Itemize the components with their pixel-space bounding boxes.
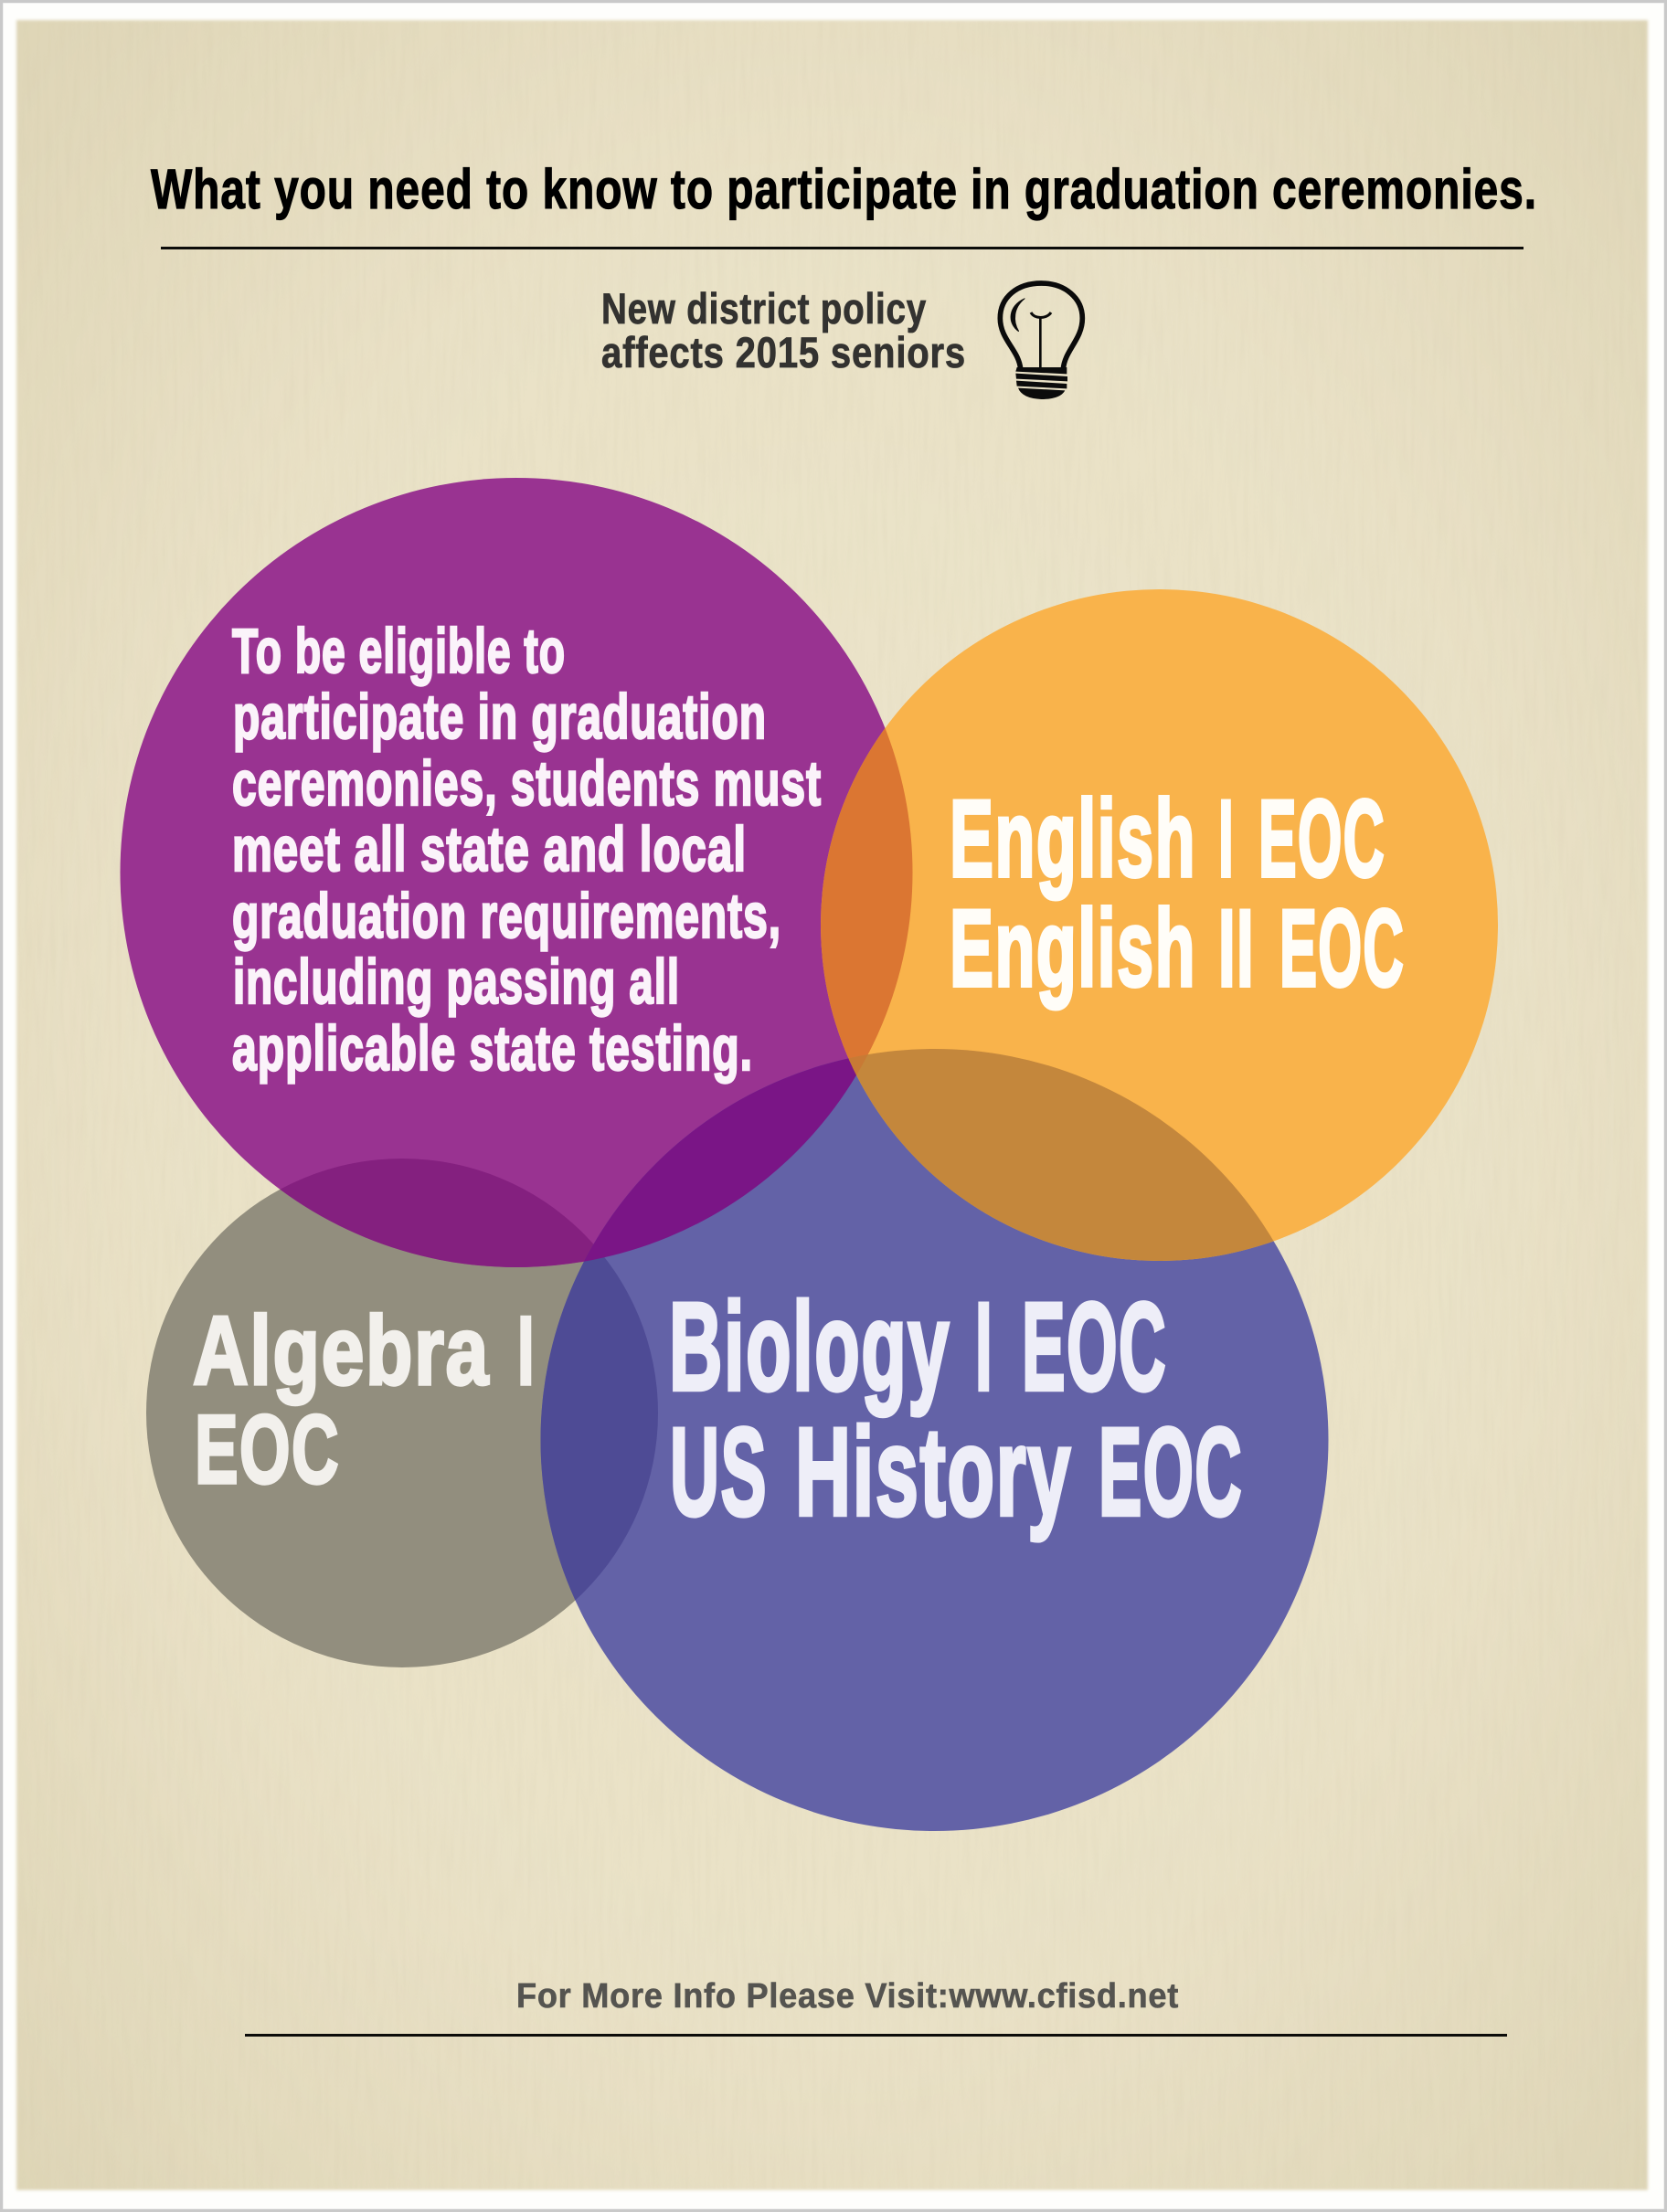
circle: algebra grey: [146, 1159, 658, 1667]
text: biology and history exams: US: [670, 1402, 768, 1542]
text: algebra exam: Algebra: [193, 1296, 490, 1405]
text: english exams: [950, 778, 1405, 1010]
text: eligibility requirements: including passing all: [233, 947, 680, 1017]
title rule: [161, 247, 1524, 249]
text: eligibility requirements: meet all state and local: [232, 814, 747, 884]
text: english exams: English: [950, 887, 1196, 1010]
overlap: purple, orange and blue: [848, 1054, 868, 1074]
text: english exams: EOC: [1258, 778, 1386, 900]
footer link text: For More Info Please Visit:www.cfisd.net: [516, 1977, 1179, 2016]
icon: light bulb: [1000, 283, 1082, 399]
text: eligibility requirements: graduation requirements,: [232, 881, 781, 951]
text: biology and history exams: [669, 1277, 1243, 1542]
subtitle: [601, 284, 966, 376]
text: biology and history exams: History: [795, 1402, 1072, 1542]
circle: biology and history blue: [541, 1049, 1329, 1831]
subtitle: New district policy: [601, 284, 927, 333]
overlap: purple and grey: [280, 1159, 594, 1267]
text: algebra exam: I: [517, 1296, 536, 1405]
overlap: purple and orange: [821, 728, 912, 1074]
text: eligibility requirements: applicable state testing.: [232, 1013, 753, 1084]
text: algebra exam: EOC: [195, 1394, 340, 1504]
text: biology and history exams: Biology: [669, 1277, 950, 1417]
text: eligibility requirements: ceremonies, students must: [232, 748, 822, 819]
text: algebra exam: [193, 1296, 536, 1504]
venn diagram circles: [121, 478, 1498, 1831]
text: biology and history exams: I: [975, 1277, 993, 1417]
text: eligibility requirements: participate in graduation: [233, 682, 767, 752]
text: english exams: English: [950, 778, 1196, 900]
text: eligibility requirements: [232, 616, 822, 1084]
subtitle: affects 2015 seniors: [601, 328, 966, 376]
footer rule: [245, 2034, 1507, 2037]
text: english exams: I: [1218, 778, 1235, 900]
text: biology and history exams: EOC: [1099, 1402, 1243, 1542]
text: eligibility requirements: To be eligible to: [232, 616, 566, 686]
text: english exams: II: [1218, 887, 1255, 1010]
text: english exams: EOC: [1279, 887, 1405, 1010]
overlap: purple and blue: [584, 1058, 856, 1262]
text: biology and history exams: EOC: [1022, 1277, 1167, 1417]
overlap: blue and grey: [541, 1244, 658, 1601]
overlap: orange and blue: [848, 1049, 1274, 1261]
circle: english orange: [821, 589, 1498, 1261]
circle: eligibility purple: [121, 478, 912, 1267]
